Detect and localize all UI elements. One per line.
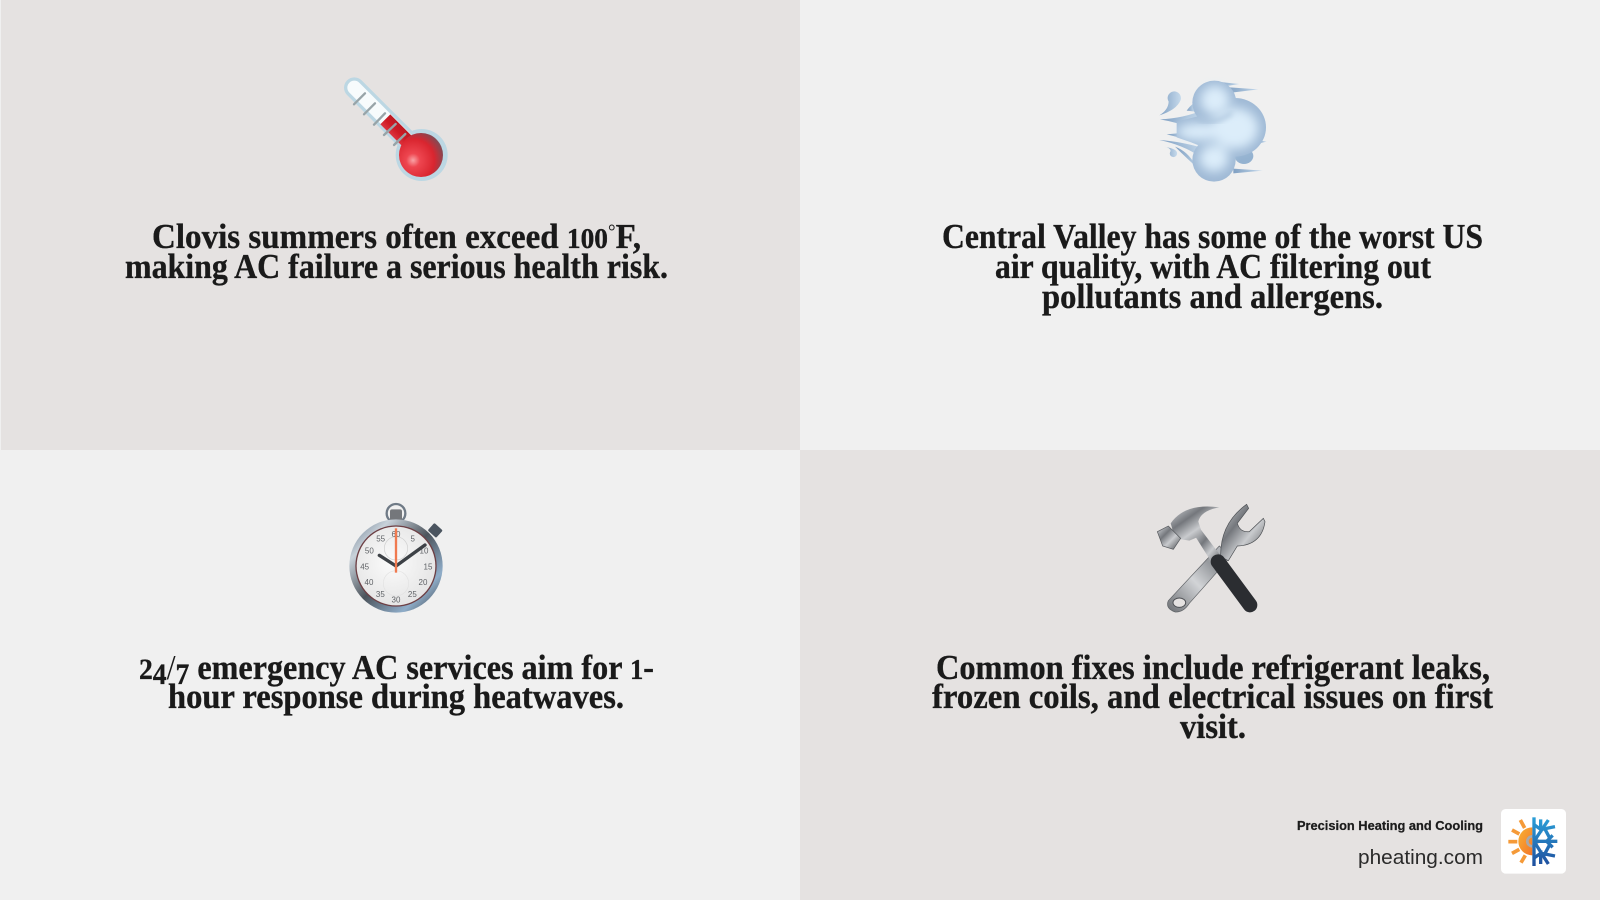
panel: common fixes [800,450,1600,900]
heading: heat: Clovis summers often exceed 100 [152,217,610,256]
heading: heat: ° [608,221,616,243]
panel: air quality [800,0,1600,450]
heading: heat: making AC failure a serious health risk. [125,247,668,286]
heading: response: emergency AC services aim for [189,648,630,687]
icon: stopwatch: 30 [392,595,401,604]
icon: cloud puff [1159,81,1267,182]
heading: response [139,648,654,716]
icon: stopwatch: 20 [419,578,428,587]
icon: stopwatch: 40 [365,578,374,587]
icon: stopwatch [349,504,443,613]
icon: stopwatch: 15 [424,563,433,572]
heading: heat: F, [616,217,641,256]
panel: heat health risk [1,0,800,450]
icon: thermometer [354,88,448,181]
heading: air quality: pollutants and allergens. [1042,277,1383,316]
icon: stopwatch: 60 [392,530,401,539]
heading: fixes: visit. [1180,707,1246,746]
heading: response: / [167,648,176,687]
heading: response: 2 [139,653,153,686]
brand block [1297,809,1566,874]
heading: response: 7 [176,658,189,691]
icon: stopwatch: 25 [408,590,417,599]
icon: stopwatch: 35 [376,590,385,599]
icon: hammer and wrench [1157,504,1265,612]
icon: stopwatch: 10 [420,546,429,555]
icon: stopwatch: 5 [410,534,415,543]
icon: stopwatch: 55 [376,534,386,543]
brand name: Precision Heating and Cooling [1297,818,1483,833]
heading: fixes: frozen coils, and electrical issues on first [932,677,1493,716]
heading: response: hour response during heatwaves. [168,677,624,716]
heading: air quality: Central Valley has some of the worst US [942,217,1483,256]
heading: air quality: air quality, with AC filtering out [995,247,1431,286]
icon: stopwatch: 45 [360,563,370,572]
heading: response: 1- [630,648,655,687]
heading: fixes: Common fixes include refrigerant leaks, [936,648,1490,687]
heading: air quality [942,217,1483,316]
logo: sun and snowflake [1501,809,1566,874]
heading: response: 4 [153,658,167,691]
panel: response time [1,450,800,900]
heading: fixes [932,648,1493,746]
icon: stopwatch: 50 [365,546,374,555]
heading: heat [125,217,668,286]
brand url: pheating.com [1358,847,1483,869]
